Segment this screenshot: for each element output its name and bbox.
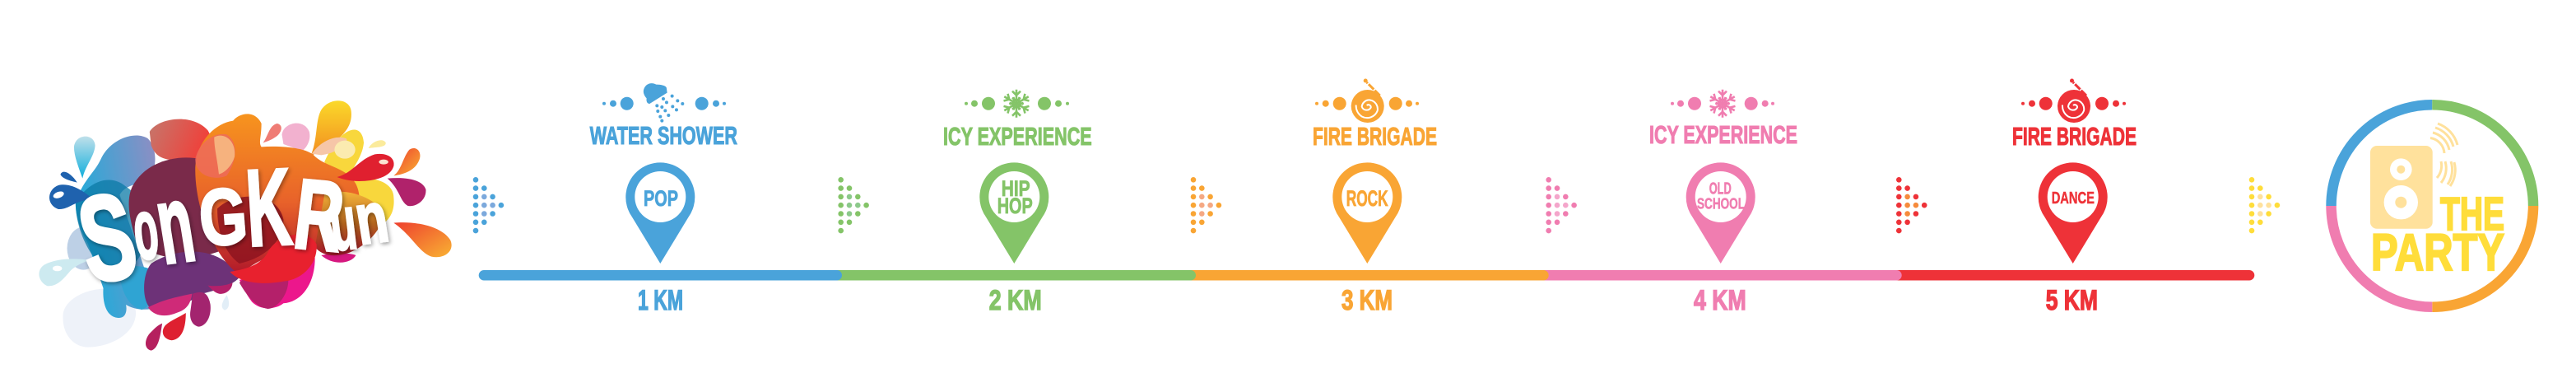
distance: 3 km: 3 KM — [1341, 285, 1393, 316]
arrow 4 — [1546, 177, 1577, 233]
stage 4: icy experience — [1649, 90, 1797, 316]
pin: pop — [625, 162, 695, 264]
label: fire brigade: FIRE BRIGADE — [2012, 122, 2137, 151]
pin: dance — [2039, 162, 2108, 264]
icon: fire hose — [1315, 79, 1419, 123]
stage 1: water shower — [590, 83, 737, 316]
arrow 5 — [1896, 177, 1927, 233]
logo wordmark: K — [243, 146, 295, 269]
icon: snowflake — [965, 90, 1069, 118]
arrow 1 — [473, 177, 504, 233]
finish badge: the party — [2332, 105, 2533, 307]
text: the party: PARTY — [2371, 224, 2504, 282]
arrow 2 — [838, 177, 869, 233]
distance: 1 km: 1 KM — [638, 285, 683, 316]
pin: old school — [1686, 162, 1755, 264]
stage 2: icy experience — [943, 90, 1092, 316]
stage 3: fire brigade — [1313, 79, 1437, 316]
distance: 5 km: 5 KM — [2046, 285, 2098, 316]
pin label: dance: DANCE — [2052, 189, 2095, 208]
pin: rock — [1332, 162, 1402, 264]
logo wordmark: n — [350, 177, 393, 260]
pin label: hip hop: HIP — [1002, 176, 1030, 201]
pin label: old school: SCHOOL — [1697, 196, 1745, 212]
route progress bar — [479, 270, 2254, 280]
logo wordmark: S — [68, 168, 146, 309]
logo wordmark: G — [196, 172, 251, 264]
logo wordmark: u — [325, 180, 361, 267]
distance: 2 km: 2 KM — [989, 285, 1042, 316]
distance: 4 km: 4 KM — [1694, 285, 1746, 316]
icon: fire hose — [2021, 79, 2126, 123]
logo wordmark: R — [289, 157, 350, 273]
icon: speaker — [2370, 124, 2457, 229]
icon: water shower — [602, 83, 726, 123]
pin: hip hop — [979, 162, 1049, 264]
logo wordmark: n — [148, 161, 202, 287]
pin label: hip hop: HOP — [997, 194, 1033, 218]
arrow 6 — [2249, 177, 2280, 233]
pin label: old school: OLD — [1709, 180, 1732, 198]
icon: snowflake — [1671, 90, 1774, 118]
text: the party: THE — [2440, 188, 2504, 240]
logo wordmark: o — [128, 182, 163, 278]
label: icy experience: ICY EXPERIENCE — [943, 122, 1092, 151]
logo wordmark — [68, 146, 393, 309]
colour ring — [2332, 105, 2533, 307]
label: fire brigade: FIRE BRIGADE — [1313, 122, 1437, 151]
arrow 3 — [1191, 177, 1221, 233]
pin label: rock: ROCK — [1346, 186, 1388, 211]
stage 5: fire brigade — [2012, 79, 2137, 316]
label: water shower: WATER SHOWER — [590, 121, 737, 150]
pin label: pop: POP — [644, 186, 678, 211]
label: icy experience: ICY EXPERIENCE — [1649, 120, 1797, 149]
logo: Songkrun colour splash — [39, 100, 452, 351]
